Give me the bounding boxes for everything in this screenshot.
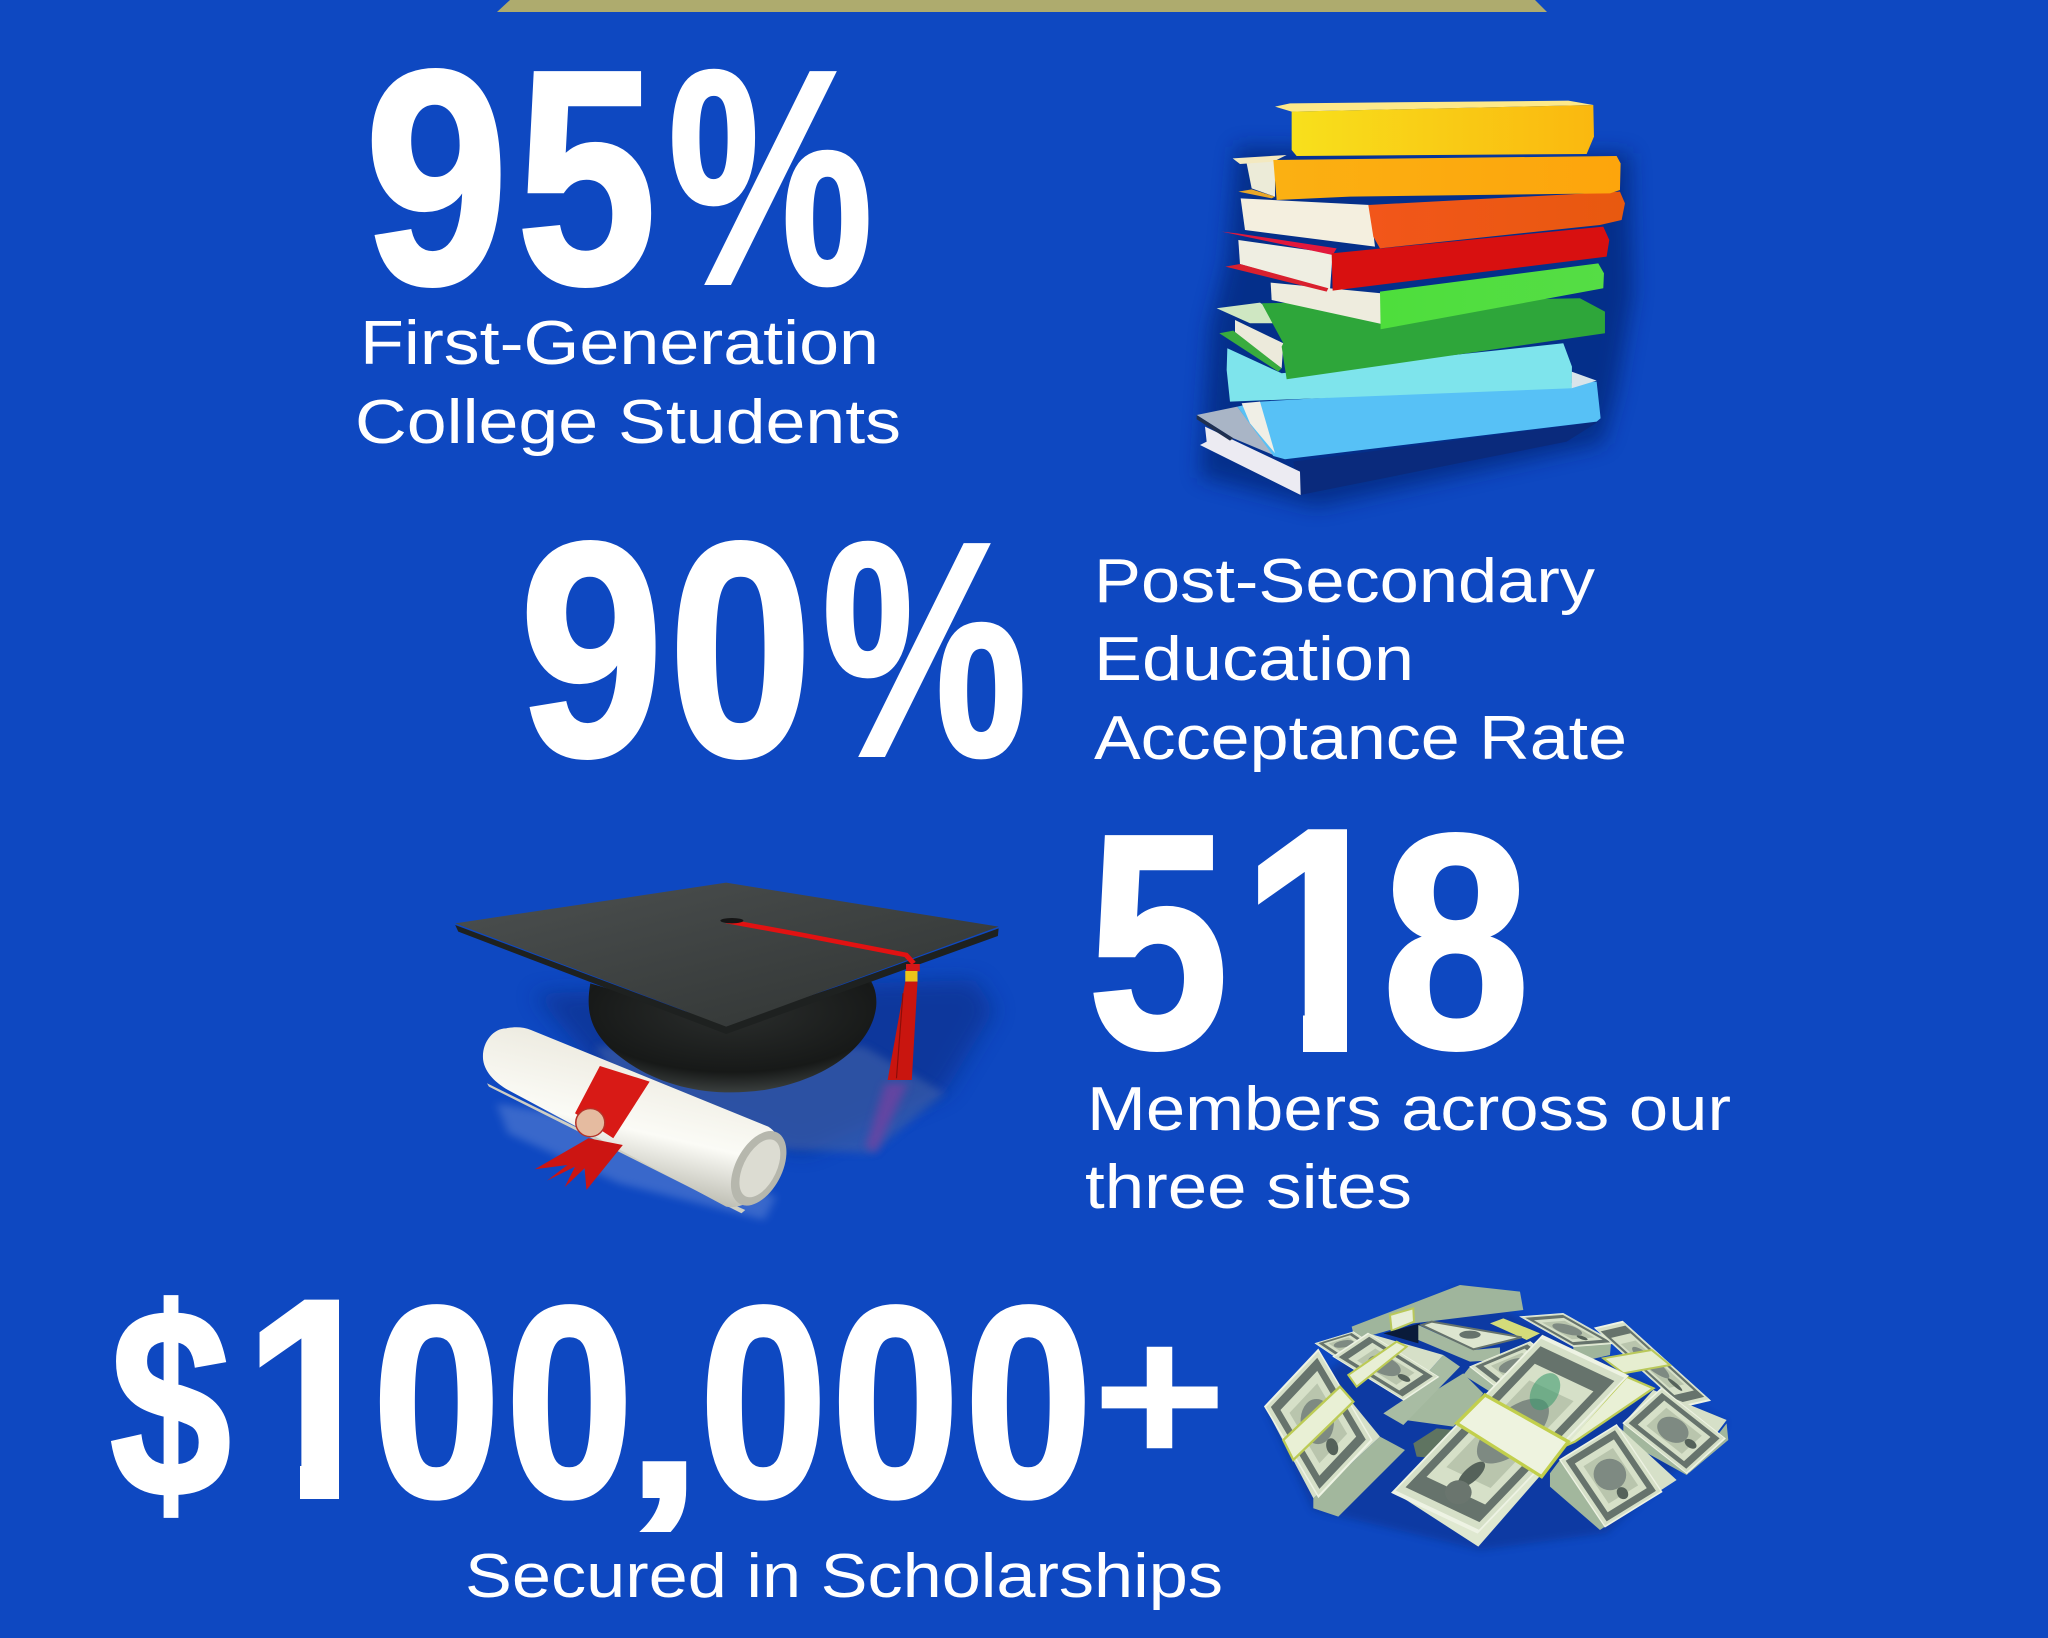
stat: $100,000+ scholarships xyxy=(111,1295,1220,1610)
icon: pile of money xyxy=(1265,1285,1728,1550)
top right bundle xyxy=(1573,1337,1612,1363)
big number $100,000+: + xyxy=(1092,1284,1227,1507)
gold header bar xyxy=(497,0,1547,12)
right lower bundle xyxy=(1550,1460,1605,1530)
red book xyxy=(1238,240,1333,290)
big number $100,000+: 0 xyxy=(372,1250,500,1554)
big number 518 xyxy=(1093,829,1524,1052)
stat: 90% acceptance rate xyxy=(520,479,1627,820)
big number 95%: 5 xyxy=(516,7,656,348)
dark bottom cover xyxy=(1293,422,1598,495)
big number 518: 1 xyxy=(1241,763,1398,1118)
dark green book xyxy=(1235,320,1283,368)
icon: graduation cap and diploma xyxy=(455,883,999,1220)
wax seal xyxy=(576,1109,605,1137)
label line 1: Members across our xyxy=(1087,1075,1731,1144)
big number $100,000+ xyxy=(111,1295,1218,1532)
big number 95%: % xyxy=(668,7,873,348)
label line 1: First-Generation xyxy=(360,309,879,378)
cord xyxy=(726,921,914,963)
big number 95% xyxy=(364,7,873,348)
big number 90%: 0 xyxy=(668,479,812,820)
back bundle xyxy=(1352,1285,1523,1340)
label line 3: Acceptance Rate xyxy=(1094,704,1627,773)
cap board edge xyxy=(455,925,999,1034)
amber book xyxy=(1247,160,1275,197)
small left bundle xyxy=(1315,1332,1373,1357)
big number 518: 8 xyxy=(1382,771,1530,1112)
main front bundle xyxy=(1563,1377,1653,1447)
cap shadow and reflection xyxy=(535,980,994,1153)
big number $100,000+: 0 xyxy=(832,1250,960,1554)
big number 518: 5 xyxy=(1088,771,1228,1112)
far right upper bundle xyxy=(1595,1322,1710,1407)
label line 1: Post-Secondary xyxy=(1094,547,1595,616)
big number $100,000+: 0 xyxy=(700,1250,828,1554)
label line 2: Education xyxy=(1094,625,1414,694)
blue book xyxy=(1237,382,1601,459)
scroll end xyxy=(720,1124,798,1213)
diploma scroll xyxy=(483,1027,783,1207)
cap board xyxy=(455,883,999,1027)
icon: stack of books xyxy=(1197,101,1633,507)
lower middle bundles xyxy=(1405,1373,1483,1427)
big number $100,000+: 0 xyxy=(506,1250,634,1554)
big number 90% xyxy=(520,479,1027,820)
label line 2: College Students xyxy=(355,388,901,457)
diploma sheet edge xyxy=(487,1083,745,1213)
big number 90%: % xyxy=(822,479,1027,820)
yellow book xyxy=(1275,101,1593,112)
orange book xyxy=(1241,198,1375,247)
ribbon band xyxy=(575,1066,650,1138)
label: Secured in Scholarships xyxy=(465,1542,1223,1611)
big number $100,000+: 0 xyxy=(964,1250,1092,1554)
cap base xyxy=(589,977,876,1092)
mid bundle xyxy=(1463,1367,1500,1392)
ribbon tails xyxy=(535,1138,623,1190)
right bundle xyxy=(1623,1423,1728,1475)
label line 2: three sites xyxy=(1085,1153,1412,1222)
left front bundle xyxy=(1313,1437,1405,1517)
big number 90%: 9 xyxy=(520,479,664,820)
big number $100,000+: 1 xyxy=(244,1241,385,1558)
left top bundle xyxy=(1383,1355,1460,1425)
main bundle band xyxy=(1457,1395,1568,1477)
big number $100,000+: $ xyxy=(110,1253,231,1553)
cyan book xyxy=(1227,343,1572,402)
big number 95%: 9 xyxy=(364,7,508,348)
stat: 518 members xyxy=(1086,829,1730,1208)
tassel xyxy=(888,964,920,1080)
light green book xyxy=(1271,283,1382,324)
center back bundle xyxy=(1418,1325,1500,1362)
big number $100,000+: , xyxy=(626,1297,702,1543)
stat: 95% first-generation college students xyxy=(355,7,901,457)
